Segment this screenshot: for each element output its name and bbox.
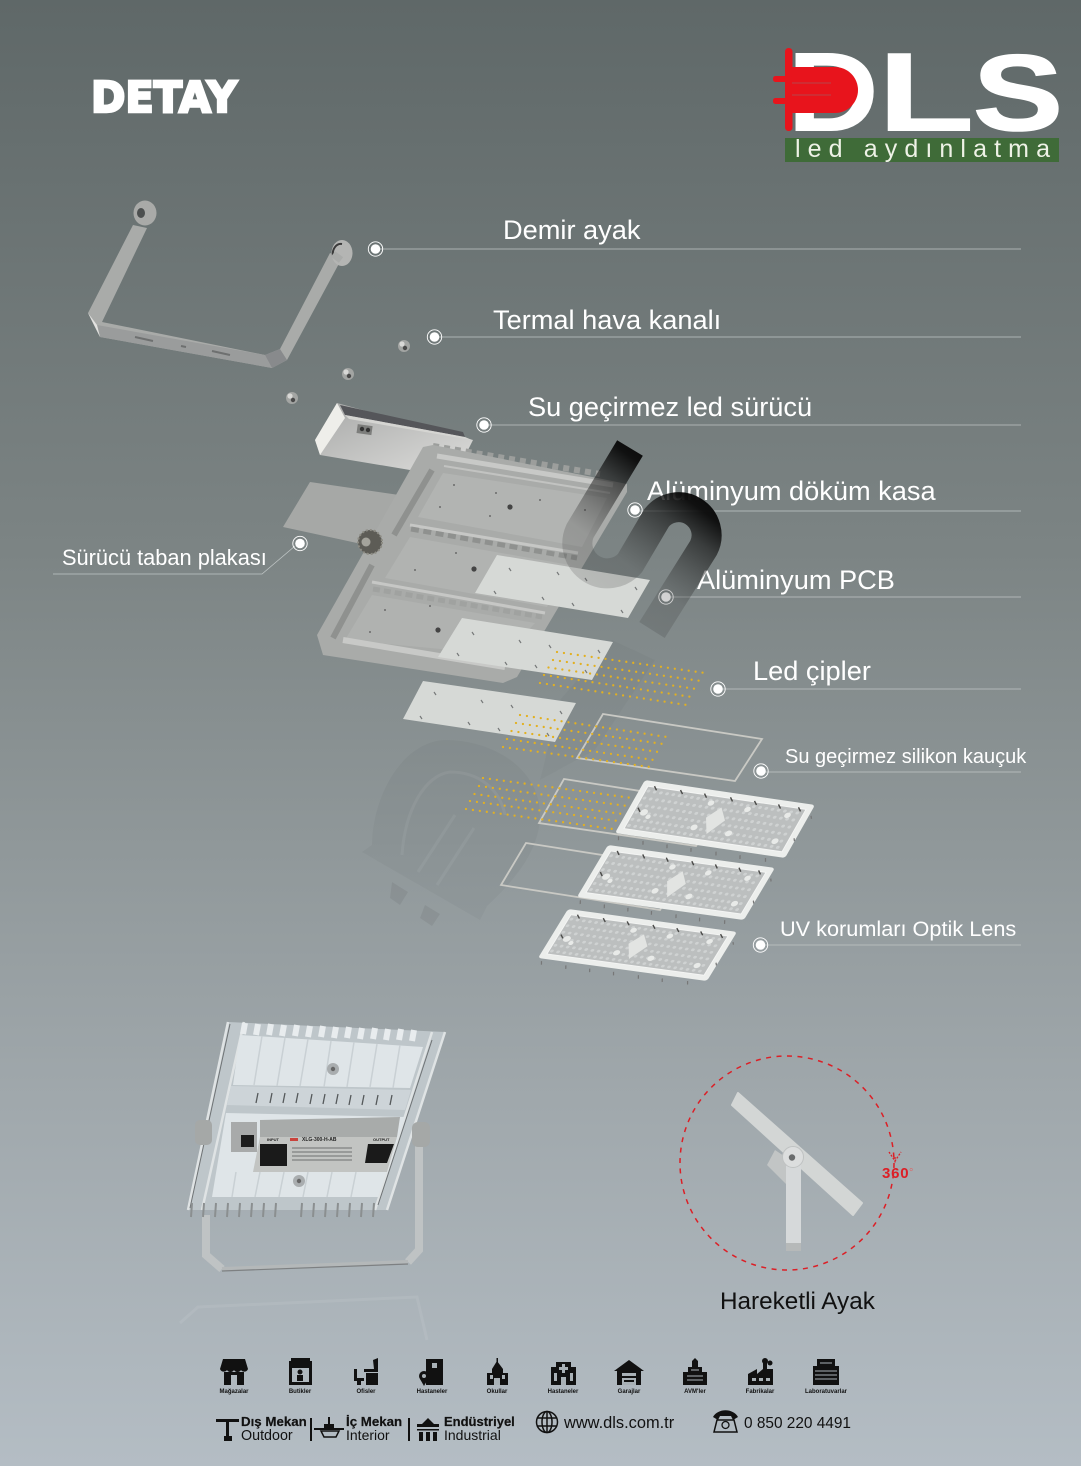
icon: butikler [289,1358,312,1395]
lamp bottom fins [191,1203,374,1217]
assembled floodlight [180,1022,445,1340]
aluminium housing [317,445,627,683]
led driver on lamp [260,1117,400,1137]
divider [310,1418,312,1441]
category: endüstriyel [417,1414,515,1443]
icon: fabrikalar [746,1358,775,1395]
icon: laboratuvarlar [805,1359,848,1395]
top fins [243,1023,414,1041]
label: led çipler: Led çipler [753,655,871,686]
icon: hastaneler [417,1359,448,1395]
assembled floodlight: INPUT [267,1137,280,1142]
phone: 0 850 220 4491 [744,1415,851,1432]
icon: ofisler: Ofisler [356,1389,376,1395]
logo: DLS led aydınlatma [773,29,1063,163]
led chip dots [466,652,705,829]
icon: hastaneler: Hastaneler [417,1389,448,1395]
label: su geçirmez silikon kauçuk: Su geçirmez silikon kauçuk [785,746,1027,768]
driver base plate [283,482,420,548]
caption: hareketli ayak: Hareketli Ayak [720,1288,876,1315]
dark S plug cable [577,448,707,630]
middle rib band [227,1086,411,1110]
category: dış mekan: Outdoor [241,1428,293,1444]
label: UV korumları optik lens: UV korumları Optik Lens [780,916,1016,941]
aluminium PCB panels [403,555,650,742]
optic lens 1 [611,780,819,866]
bracket: demir ayak [88,200,352,368]
label: su geçirmez silikon kauçuk [754,746,1027,778]
category: endüstriyel: Endüstriyel [444,1414,515,1429]
icon: ofisler [354,1358,378,1395]
logo: DLS led aydınlatma: D [787,29,879,155]
category: iç mekan [314,1414,402,1443]
silicone gasket frames [501,714,762,910]
logo: DLS led aydınlatma: L [877,29,975,155]
category: endüstriyel: Industrial [444,1427,501,1443]
label: alüminyum döküm kasa: Alüminyum döküm kasa [647,475,936,506]
icon: fabrikalar: Fabrikalar [746,1389,775,1395]
category: iç mekan: Interior [346,1427,390,1443]
icon: mağazalar: Mağazalar [219,1389,249,1395]
label: alüminyum döküm kasa [628,475,1021,517]
label: led çipler [711,655,1021,696]
website [536,1411,675,1433]
rotating bracket diagram: ° [909,1167,913,1179]
label: su geçirmez led sürücü [477,391,1021,432]
label: sürücü taban plakası [53,536,307,574]
cooling fins [433,446,600,474]
website: www.dls.com.tr [563,1414,675,1432]
label: alüminyum PCB [659,564,1021,604]
label: sürücü taban plakası: Sürücü taban plakası [62,545,267,570]
icon: hastaneler 2: Hastaneler [548,1389,579,1395]
lamp bracket [206,1143,419,1269]
label: termal hava kanalı: Termal hava kanalı [493,304,721,335]
label: demir ayak: Demir ayak [503,214,641,245]
mounting nuts [327,1063,339,1075]
icon: okullar: Okullar [487,1389,508,1395]
optic lens 2 [573,845,779,927]
icon: butikler: Butikler [289,1389,312,1395]
lamp reflection [180,1297,427,1340]
title: DETAY [91,73,238,123]
divider [408,1418,410,1441]
pivot knobs [195,1120,212,1145]
icon: hastaneler 2 [548,1362,579,1395]
lamp frame [188,1022,445,1210]
label: su geçirmez led sürücü: Su geçirmez led sürücü [528,391,812,422]
label: termal hava kanalı [427,304,1021,344]
lower led panel [212,1113,405,1197]
gear knob [358,530,382,554]
icon: okullar [487,1358,508,1395]
assembled floodlight: XLG-300-H-AB [302,1137,337,1143]
icon: garajlar: Garajlar [618,1389,641,1395]
assembled floodlight: OUTPUT [373,1137,390,1142]
category: dış mekan: Dış Mekan [241,1414,307,1429]
label: UV korumları optik lens [753,916,1021,952]
nuts [286,340,410,404]
waterproof led driver [315,403,473,470]
upper led panel [233,1035,423,1088]
category: iç mekan: İç Mekan [346,1414,402,1429]
faint plug watermark [362,640,655,926]
icon: avm'ler: AVM'ler [684,1389,706,1395]
icon: mağazalar [219,1359,249,1395]
label: demir ayak [368,214,1021,256]
rotating bracket diagram [680,1056,913,1270]
rotating bracket diagram: 360 [882,1165,909,1182]
category: dış mekan [216,1414,307,1444]
icon: avm'ler [683,1358,707,1395]
icon: garajlar [614,1360,644,1395]
logo: DLS led aydınlatma: S [973,32,1063,153]
logo: DLS led aydınlatma: led aydınlatma [795,135,1050,163]
icon: laboratuvarlar: Laboratuvarlar [805,1389,848,1395]
optic lens 3 [534,909,741,988]
phone [713,1410,851,1432]
label: alüminyum PCB: Alüminyum PCB [697,564,895,595]
